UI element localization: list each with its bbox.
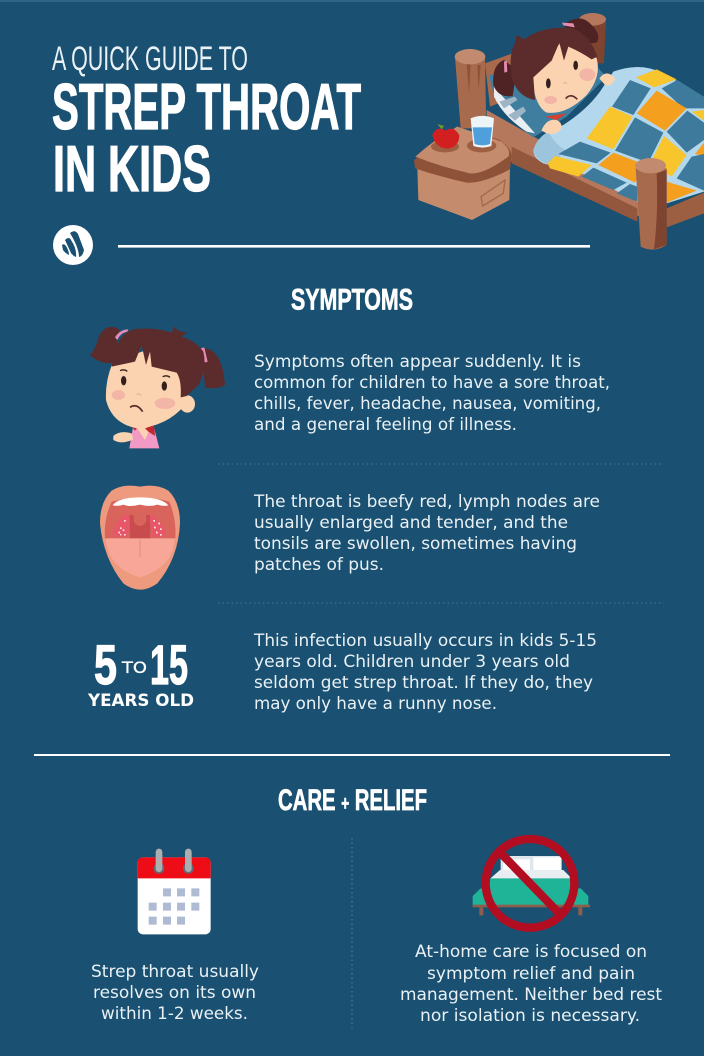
- blanket quilt patches: [548, 69, 704, 203]
- text: age information: This infection usually occurs in kids 5-15: [253, 631, 597, 650]
- text: age information: years old. Children under 3 years old: [254, 652, 570, 671]
- heading: care + relief: CARE + RELIEF: [278, 784, 427, 817]
- text: throat signs: tonsils are swollen, sometimes having: [254, 534, 577, 553]
- girl eyes, mouth, cheeks: [544, 61, 595, 104]
- text: at-home care: management. Neither bed rest: [400, 985, 663, 1004]
- text: care duration: [91, 962, 259, 1023]
- text: care duration: within 1-2 weeks.: [101, 1004, 248, 1023]
- text: throat signs: [253, 492, 600, 574]
- girl hands: [542, 73, 615, 134]
- text: symptoms overview: common for children to have a sore throat,: [254, 373, 610, 392]
- ear: [180, 395, 195, 413]
- text: at-home care: At-home care is focused on: [415, 942, 647, 961]
- throat: [129, 515, 151, 538]
- tongue: [106, 538, 175, 577]
- text: symptoms overview: and a general feeling of illness.: [254, 415, 517, 434]
- glass of water: [467, 116, 496, 152]
- prohibition sign: [486, 839, 574, 928]
- illustration: sick girl in bed: [414, 13, 704, 250]
- text: throat signs: patches of pus.: [254, 555, 384, 574]
- icon: calendar: [138, 849, 211, 934]
- icon: logo: [53, 225, 93, 265]
- age range: 5 to 15 years old: TO: [121, 658, 147, 677]
- text: at-home care: nor isolation is necessary.: [420, 1006, 640, 1025]
- illustration: girl with sore throat: [90, 327, 225, 448]
- title: IN KIDS: [53, 132, 211, 205]
- text: age information: seldom get strep throat. If they do, they: [254, 673, 593, 692]
- text: care duration: resolves on its own: [93, 983, 256, 1002]
- title: A QUICK GUIDE TO: [52, 40, 248, 78]
- text: at-home care: [400, 942, 663, 1025]
- text: symptoms overview: [254, 352, 610, 434]
- blanket lower fold: [533, 132, 567, 165]
- back bed post: [579, 13, 606, 63]
- hair: [112, 327, 205, 397]
- nightstand: [414, 127, 512, 220]
- girl face: [532, 43, 598, 113]
- face: [106, 350, 185, 428]
- lips: [100, 486, 180, 590]
- left bed post: [455, 49, 486, 128]
- heading: symptoms: SYMPTOMS: [291, 284, 413, 316]
- mouth interior: [105, 497, 176, 538]
- icon: no bed rest: [473, 839, 590, 928]
- girl hair back and pigtails: [493, 18, 598, 96]
- pillow: [489, 67, 607, 137]
- text: throat signs: usually enlarged and tender, and the: [254, 513, 568, 532]
- text: care duration: Strep throat usually: [91, 962, 259, 981]
- title: [52, 40, 361, 205]
- text: symptoms overview: Symptoms often appear suddenly. It is: [254, 352, 581, 371]
- front bed post: [635, 158, 667, 250]
- tonsils: [113, 514, 166, 537]
- text: age information: [253, 631, 597, 713]
- age range: 5 to 15 years old: [87, 633, 194, 711]
- text: age information: may only have a runny nose.: [254, 694, 497, 713]
- bed frame: [487, 110, 704, 227]
- text: throat signs: The throat is beefy red, lymph nodes are: [253, 492, 600, 511]
- illustration: open mouth with swollen tonsils: [100, 486, 180, 590]
- girl hair: [511, 28, 597, 100]
- text: at-home care: symptom relief and pain: [427, 964, 635, 983]
- headboard: [485, 27, 597, 107]
- text: symptoms overview: chills, fever, headache, nausea, vomiting,: [254, 394, 601, 413]
- neck and dress: [113, 424, 159, 448]
- pigtails: [90, 327, 225, 388]
- age range: 5 to 15 years old: 15: [150, 633, 188, 696]
- title: STREP THROAT: [52, 70, 361, 143]
- age range: 5 to 15 years old: 5: [94, 633, 117, 696]
- apple: [431, 124, 459, 152]
- teeth: [113, 497, 168, 506]
- bed: [473, 856, 590, 915]
- age range: 5 to 15 years old: YEARS OLD: [87, 691, 194, 711]
- eyes, mouth and cheeks: [112, 370, 175, 412]
- blanket: [533, 67, 704, 203]
